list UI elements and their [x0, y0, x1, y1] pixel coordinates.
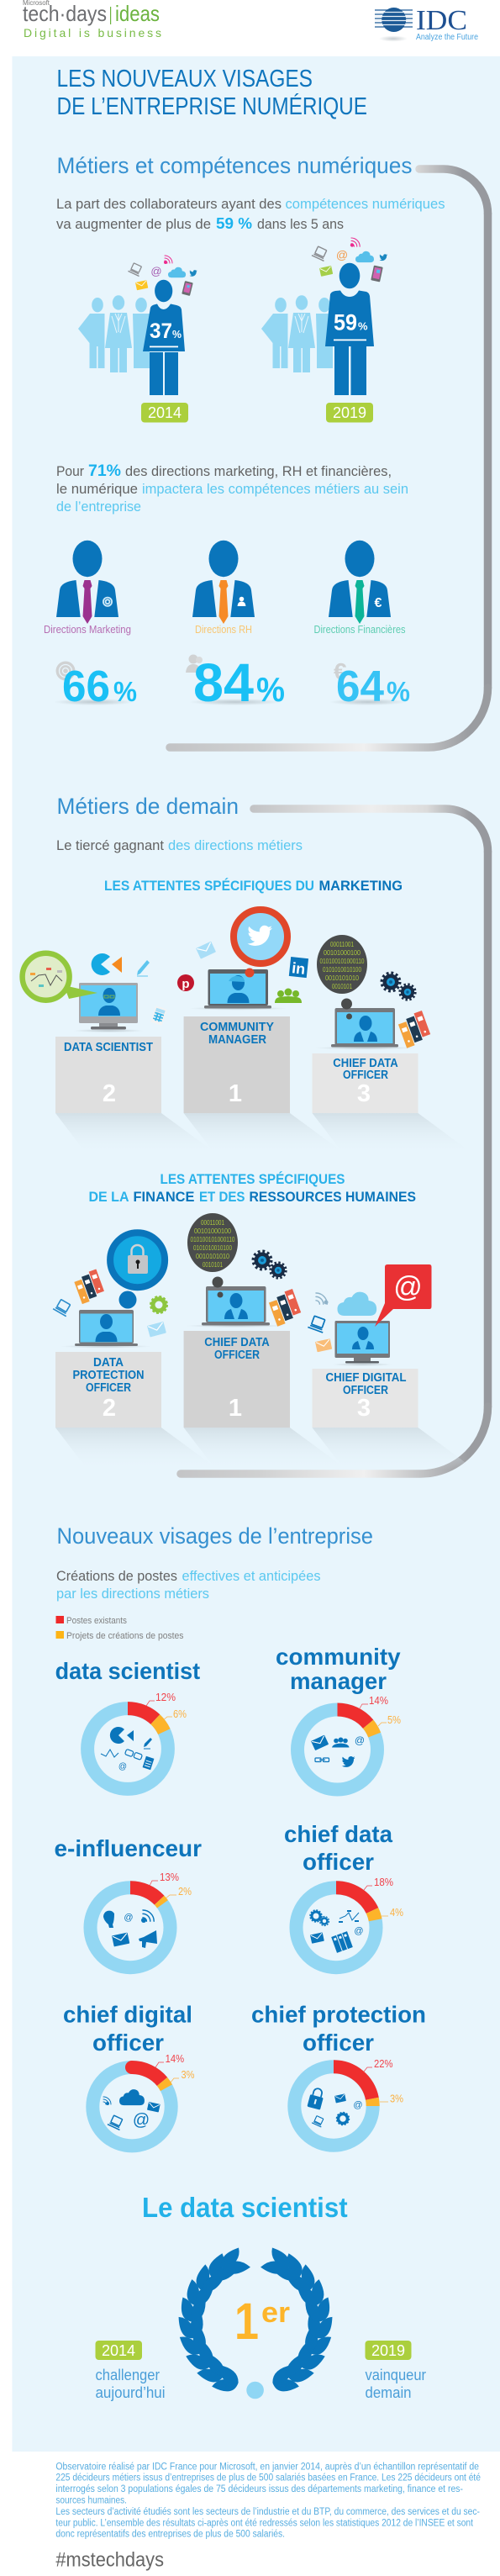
subheading: attentes du marketing: LES ATTENTES SPÉCIFIQUES DU [104, 878, 314, 894]
icons: chief data officer [315, 935, 432, 1049]
heading: Métiers de demain: Métiers de demain [57, 794, 239, 819]
subheading: attentes finance et RH: FINANCE [133, 1190, 195, 1205]
donut: chief digital officer: @ [133, 2111, 150, 2130]
donut: chief protection officer: 22% [374, 2058, 393, 2070]
logo: IDC: IDC [416, 5, 467, 36]
stat: 84% [186, 652, 285, 713]
text: créations de postes: par les directions métiers [56, 1586, 209, 1602]
heading: data scientist: data scientist [55, 1658, 200, 1684]
podium 2: column 3 chief digital officer: OFFICER [343, 1384, 388, 1397]
stat: 64%: € [334, 658, 347, 684]
stat: 84%: % [256, 670, 285, 709]
badge: 2014 challenger [96, 2341, 165, 2401]
footnote [55, 2462, 481, 2540]
icons: chief data officer finance: 0010101 [203, 1261, 223, 1269]
icons: chief digital officer [308, 1264, 432, 1366]
podium 2: column 2 data protection officer: DATA [93, 1356, 124, 1370]
podium 2: column 3 chief digital officer [313, 1369, 475, 1470]
badge: 2014 challenger: challenger [96, 2367, 160, 2383]
podium 2: column 1 chief data officer: 1 [229, 1395, 242, 1422]
footnote: sources humaines. [55, 2495, 127, 2505]
text: 71% des directions: de l’entreprise [56, 499, 141, 515]
podium 1: column 2 data scientist: DATA SCIENTIST [64, 1041, 153, 1054]
laurel wreath with 1er: 1 [234, 2293, 259, 2350]
heading: chief protection officer [251, 2002, 426, 2056]
figure: direction marketing [44, 541, 131, 636]
figure: people 2019 59%: @ [336, 248, 348, 261]
icons: chief data officer: 0010101010 [325, 974, 359, 982]
heading: chief digital officer: chief digital [63, 2002, 192, 2028]
subheading: attentes finance et RH: LES ATTENTES SPÉCIFIQUES [160, 1171, 345, 1187]
stat: 66%: % [113, 676, 137, 707]
logo: Microsoft tech days ideas: Digital is business [24, 26, 161, 40]
badge: 2019 vainqueur: 2019 [371, 2342, 405, 2359]
icons: chief data officer finance: 0101010010100 [193, 1244, 232, 1252]
title: DE L’ENTREPRISE NUMÉRIQUE [57, 92, 367, 120]
podium 2: column 1 chief data officer [184, 1331, 347, 1470]
text: le tiercé gagnant [56, 837, 303, 853]
heading: chief protection officer: chief protection [251, 2002, 426, 2028]
donut: community manager [297, 1695, 401, 1789]
donut: data scientist: 12% [155, 1692, 176, 1703]
heading: chief data officer: officer [303, 1849, 374, 1875]
heading: community manager [276, 1644, 401, 1694]
podium 1: column 1 community manager: COMMUNITY [200, 1021, 274, 1034]
badge: 2019 [326, 403, 373, 422]
footnote: donc représentatifs des entreprises de plus de 500 salariés. [55, 2530, 285, 2540]
logo: Microsoft tech days ideas: ideas [115, 1, 160, 26]
stat: 84%: 84 [193, 652, 254, 713]
icons: data scientist [23, 953, 167, 1032]
icons: chief data officer: 010100101000110 [319, 958, 365, 965]
donut: community manager: 5% [387, 1714, 401, 1726]
podium 1: column 1 community manager [184, 1016, 347, 1155]
podium 2: column 1 chief data officer: OFFICER [214, 1349, 260, 1362]
podium 2: column 2 data protection officer: PROTECTION [72, 1369, 145, 1382]
heading: chief protection officer: officer [303, 2030, 374, 2056]
podium 2: column 2 data protection officer: 2 [103, 1395, 116, 1422]
podium 1: column 1 community manager: 1 [229, 1080, 242, 1107]
donut: data scientist: 6% [173, 1708, 187, 1720]
text: créations de postes: effectives et anticipées [182, 1568, 321, 1584]
heading: community manager: community [276, 1644, 401, 1670]
text: 71% des directions: le numérique [56, 481, 138, 497]
heading: Nouveaux visages de l'entreprise: Nouveaux visages de l’entreprise [57, 1523, 373, 1549]
donut: e-influenceur [91, 1871, 192, 1967]
logo: IDC: Analyze the Future [416, 33, 478, 42]
text: part des collaborateurs [56, 196, 445, 232]
heading: Le data scientist: Le data scientist [142, 2192, 348, 2223]
icons: chief data officer finance: 00011001 [201, 1219, 224, 1227]
bracket: first section frame [170, 169, 487, 747]
donut: e-influenceur: @ [124, 1913, 134, 1923]
text: part des collaborateurs: dans les 5 ans [257, 216, 344, 232]
figure: direction marketing: Directions Marketing [44, 623, 131, 636]
icons: chief data officer: 00101000100 [324, 949, 361, 957]
stat: 64%: 64 [336, 662, 384, 711]
figure: people 2019 59%: 59 [334, 310, 357, 335]
badge: 2019: 2019 [333, 404, 366, 421]
figure: direction financière: Directions Financières [314, 623, 406, 636]
donut: chief data officer: @ [354, 1926, 364, 1936]
logo: Microsoft tech days ideas: tech·days [23, 1, 107, 26]
icons: community manager: p [182, 977, 190, 991]
donut: chief protection officer [294, 2058, 403, 2146]
donut: community manager: 14% [369, 1695, 388, 1707]
donut: data scientist: @ [118, 1762, 127, 1771]
figure: people 2014 37%: @ [150, 265, 162, 277]
podium 2: column 2 data protection officer [55, 1352, 218, 1470]
donut: chief data officer: 4% [390, 1907, 403, 1919]
text: part des collaborateurs: 59 % [216, 215, 252, 232]
legend: Projets de créations de postes [66, 1631, 184, 1641]
podium 2: column 1 chief data officer: CHIEF DATA [204, 1336, 270, 1349]
subheading: attentes finance et RH: ET DES [199, 1190, 245, 1205]
donut: chief protection officer: @ [353, 2100, 363, 2110]
title [57, 66, 367, 120]
heading: Métiers et compétences numériques: Métiers et compétences numériques [57, 153, 412, 178]
heading: chief data officer [284, 1821, 392, 1875]
podium 1: column 1 community manager: MANAGER [208, 1033, 266, 1047]
figure: direction RH [192, 541, 255, 636]
figure: direction RH: Directions RH [195, 623, 252, 636]
podium 1: column 3 chief data officer [313, 1053, 475, 1155]
icons: chief data officer: 0101010010100 [323, 966, 361, 974]
logo: IDC [375, 5, 478, 42]
text: 71% des directions: 71% [88, 462, 121, 480]
donut: community manager: @ [355, 1734, 365, 1746]
donut: e-influenceur: 2% [178, 1886, 192, 1898]
donut: chief digital officer: 3% [182, 2069, 195, 2081]
icons: data protection officer [53, 1233, 167, 1349]
heading: e-influenceur: e-influenceur [54, 1835, 202, 1861]
subheading: attentes finance et RH [89, 1171, 416, 1205]
podium 2: column 3 chief digital officer: 3 [357, 1395, 371, 1422]
laurel wreath with 1er: er [261, 2297, 290, 2329]
text: créations de postes [56, 1568, 321, 1602]
donut: data scientist [87, 1692, 187, 1789]
text: part des collaborateurs: La part des collaborateurs ayant des [56, 196, 282, 212]
stat: 66% [54, 661, 137, 711]
badge: 2014: 2014 [148, 404, 182, 421]
stat: 64%: % [387, 676, 410, 707]
donut: chief digital officer [92, 2053, 195, 2146]
laurel wreath with 1er [177, 2246, 334, 2399]
badge: 2014 challenger: 2014 [102, 2342, 135, 2359]
icons: chief data officer finance: 010100101000110 [190, 1236, 235, 1243]
subheading: attentes finance et RH: DE LA [89, 1190, 129, 1205]
legend: Postes existants [66, 1616, 127, 1626]
subheading: attentes du marketing: MARKETING [319, 879, 403, 894]
badge: 2019 vainqueur: vainqueur [365, 2367, 426, 2383]
icons: chief data officer finance: 0010101010 [196, 1253, 229, 1260]
podium 1: column 3 chief data officer: 3 [357, 1080, 371, 1107]
badge: 2019 vainqueur [365, 2341, 426, 2401]
subheading: attentes finance et RH: RESSOURCES HUMAINES [249, 1190, 416, 1205]
text: 71% des directions [56, 462, 408, 515]
figure: people 2019 59% [261, 238, 387, 395]
icons: chief data officer finance: 00101000100 [194, 1227, 231, 1235]
figure: people 2014 37%: % [172, 328, 182, 340]
text: 71% des directions: Pour [56, 463, 84, 479]
donut: chief digital officer: 14% [166, 2053, 184, 2065]
text: 71% des directions: impactera les compétences métiers au sein [142, 481, 408, 497]
donut: chief data officer [296, 1877, 403, 1967]
logo: Microsoft tech days ideas [23, 0, 161, 40]
bracket: second section frame [181, 809, 488, 1474]
icons: community manager [177, 910, 308, 1011]
icons: chief data officer: 00011001 [330, 941, 354, 948]
hashtag: #mstechdays [55, 2549, 164, 2572]
heading: chief data officer: chief data [284, 1821, 392, 1847]
stat: 66%: 66 [62, 662, 110, 711]
figure: direction financière: € [375, 596, 382, 610]
legend [55, 1616, 184, 1641]
heading: chief digital officer: officer [92, 2030, 164, 2056]
icons: community manager: in [291, 959, 306, 978]
figure: people 2019 59%: % [358, 320, 368, 333]
badge: 2014 [141, 403, 188, 422]
podium 1: column 2 data scientist [55, 1037, 218, 1155]
podium 2: column 2 data protection officer: OFFICER [86, 1381, 131, 1395]
text: part des collaborateurs: compétences numériques [286, 196, 445, 212]
heading: community manager: manager [290, 1668, 387, 1694]
podium 1: column 3 chief data officer: CHIEF DATA [333, 1057, 398, 1070]
title: LES NOUVEAUX VISAGES [57, 66, 313, 92]
icons: chief data officer: 0010101 [332, 983, 352, 990]
footnote: interrogés selon 3 populations égales de 75 décideurs issus des départements marketing, finance et res- [55, 2484, 463, 2494]
podium 2: column 3 chief digital officer: CHIEF DIGITAL [326, 1371, 407, 1385]
badge: 2019 vainqueur: demain [365, 2384, 412, 2401]
donut: chief data officer: 18% [374, 1877, 393, 1888]
stat: 64% [329, 658, 410, 711]
text: part des collaborateurs: va augmenter de plus de [56, 216, 211, 232]
figure: direction financière [314, 541, 406, 636]
badge: 2014 challenger: aujourd’hui [96, 2384, 165, 2401]
icons: chief data officer finance [186, 1213, 303, 1328]
podium 1: column 3 chief data officer: OFFICER [343, 1069, 388, 1082]
text: 71% des directions: des directions marketing, RH et financières, [125, 463, 392, 479]
text: le tiercé gagnant: des directions métiers [168, 837, 303, 853]
icons: chief digital officer: @ [393, 1271, 423, 1303]
podium 1: column 2 data scientist: 2 [103, 1080, 116, 1107]
donut: chief protection officer: 3% [390, 2093, 403, 2105]
heading: chief digital officer [63, 2002, 192, 2056]
figure: people 2014 37% [78, 256, 197, 395]
text: créations de postes: Créations de postes [56, 1568, 177, 1584]
figure: people 2014 37%: 37 [150, 319, 172, 343]
donut: e-influenceur: 13% [160, 1871, 179, 1883]
text: le tiercé gagnant: Le tiercé gagnant [56, 837, 164, 853]
